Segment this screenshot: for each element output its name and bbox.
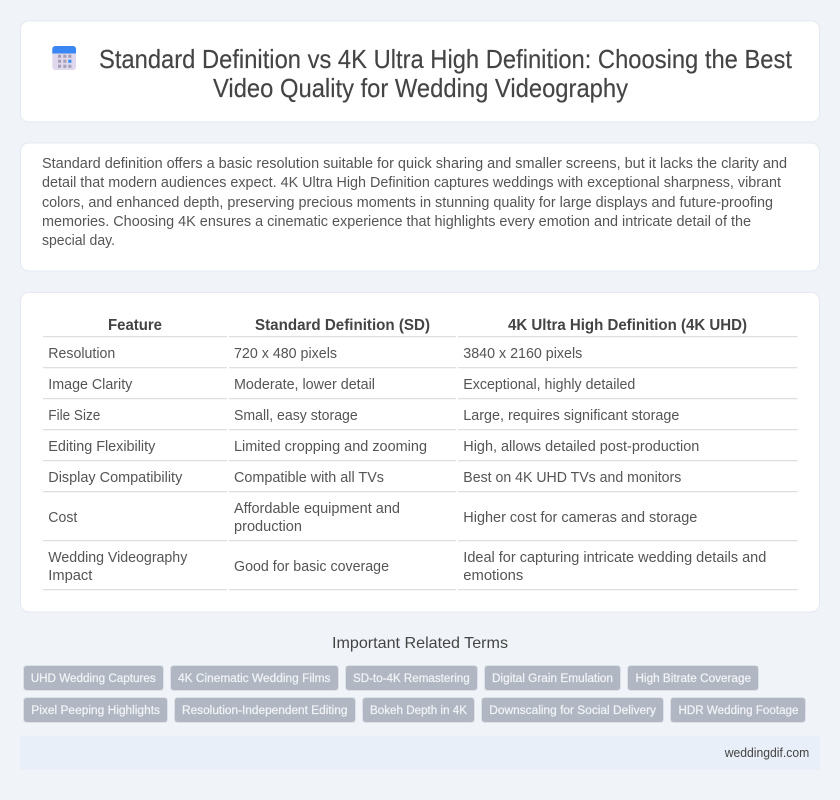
- summary text: special day.: [42, 233, 115, 249]
- row: display compatibility: [48, 470, 681, 486]
- row: image clarity: Moderate, lower detail: [234, 377, 375, 393]
- row: display compatibility: Compatible with all TVs: [234, 470, 384, 486]
- chip: Bokeh Depth in 4K: [362, 698, 474, 722]
- row: image clarity: Exceptional, highly detailed: [463, 377, 635, 393]
- summary text: memories. Choosing 4K ensures a cinematic experience that highlights every emotion and intricate detail of the: [42, 214, 751, 230]
- row: cost: Cost: [48, 510, 77, 526]
- footer: [20, 736, 820, 770]
- row: cost: Higher cost for cameras and storage: [463, 510, 697, 526]
- row: file size: [48, 408, 679, 424]
- row: cost: Affordable equipment and: [234, 501, 400, 517]
- related terms heading: Important Related Terms: [332, 635, 508, 652]
- title: Video Quality for Wedding Videography: [213, 75, 628, 103]
- chip: UHD Wedding Captures: UHD Wedding Captures: [31, 671, 156, 685]
- row: resolution: 3840 x 2160 pixels: [463, 346, 582, 362]
- chip: Resolution-Independent Editing: Resolution-Independent Editing: [182, 703, 348, 717]
- row: editing flexibility: [48, 439, 699, 455]
- summary text: Standard definition offers a basic resolution suitable for quick sharing and smaller screens, but it lacks the clarity and: [42, 156, 787, 172]
- chip: Bokeh Depth in 4K: Bokeh Depth in 4K: [370, 703, 468, 717]
- row: image clarity: Image Clarity: [48, 377, 133, 393]
- row: wedding videography impact: Impact: [48, 568, 92, 584]
- chip: 4K Cinematic Wedding Films: [170, 666, 338, 690]
- panel: summary: [20, 143, 820, 271]
- row: editing flexibility: Limited cropping and zooming: [234, 439, 427, 455]
- chip: High Bitrate Coverage: High Bitrate Coverage: [636, 671, 751, 685]
- chip: SD-to-4K Remastering: [346, 666, 478, 690]
- row: wedding videography impact: Wedding Videography: [48, 550, 188, 566]
- row: file size: Small, easy storage: [234, 408, 358, 424]
- row: wedding videography impact: Ideal for capturing intricate wedding details and: [463, 550, 766, 566]
- summary text: detail that modern audiences expect. 4K Ultra High Definition captures weddings with exceptional sharpness, vibrant: [42, 175, 781, 191]
- row: image clarity: [48, 377, 635, 393]
- table header: Feature: [108, 317, 162, 334]
- row: wedding videography impact: Good for basic coverage: [234, 559, 389, 575]
- row: wedding videography impact: emotions: [463, 568, 523, 584]
- chip: 4K Cinematic Wedding Films: 4K Cinematic Wedding Films: [178, 671, 330, 685]
- row: file size: Large, requires significant storage: [463, 408, 679, 424]
- chip: Resolution-Independent Editing: [174, 698, 356, 722]
- summary text: [42, 156, 787, 249]
- chip: Downscaling for Social Delivery: [482, 698, 664, 722]
- chip: HDR Wedding Footage: [670, 698, 806, 722]
- table header: 4K Ultra High Definition (4K UHD): [508, 317, 747, 334]
- chip: High Bitrate Coverage: [628, 666, 758, 690]
- row: display compatibility: Best on 4K UHD TVs and monitors: [463, 470, 681, 486]
- row: editing flexibility: High, allows detailed post-production: [463, 439, 699, 455]
- panel: title header: [20, 21, 820, 122]
- title: Standard Definition vs 4K Ultra High Definition: Choosing the Best: [99, 46, 792, 74]
- chip: HDR Wedding Footage: HDR Wedding Footage: [678, 703, 799, 717]
- chip: Downscaling for Social Delivery: Downscaling for Social Delivery: [489, 703, 657, 717]
- chip: Digital Grain Emulation: [484, 666, 620, 690]
- table header: Standard Definition (SD): [255, 317, 430, 334]
- row: resolution: 720 x 480 pixels: [234, 346, 337, 362]
- panel: comparison table: [20, 292, 820, 612]
- row: display compatibility: Display Compatibility: [48, 470, 183, 486]
- row: resolution: Resolution: [48, 346, 115, 362]
- row: wedding videography impact: [48, 550, 766, 584]
- row: cost: production: [234, 519, 302, 535]
- chip: Pixel Peeping Highlights: [24, 698, 168, 722]
- chip: Pixel Peeping Highlights: Pixel Peeping Highlights: [31, 703, 160, 717]
- table header: [108, 317, 747, 334]
- row: editing flexibility: Editing Flexibility: [48, 439, 156, 455]
- row: resolution: [48, 346, 582, 362]
- row: cost: [48, 501, 697, 535]
- row: file size: File Size: [48, 408, 100, 424]
- footer: weddingdif.com: [724, 745, 809, 760]
- title: [99, 46, 792, 103]
- chip: UHD Wedding Captures: [24, 666, 164, 690]
- summary text: colors, and enhanced depth, preserving precious moments in stunning quality for large displays and future-proofing: [42, 195, 773, 211]
- related terms chips: [24, 666, 806, 722]
- icon: calendar: [52, 46, 76, 70]
- chip: SD-to-4K Remastering: SD-to-4K Remastering: [353, 671, 470, 685]
- chip: Digital Grain Emulation: Digital Grain Emulation: [492, 671, 613, 685]
